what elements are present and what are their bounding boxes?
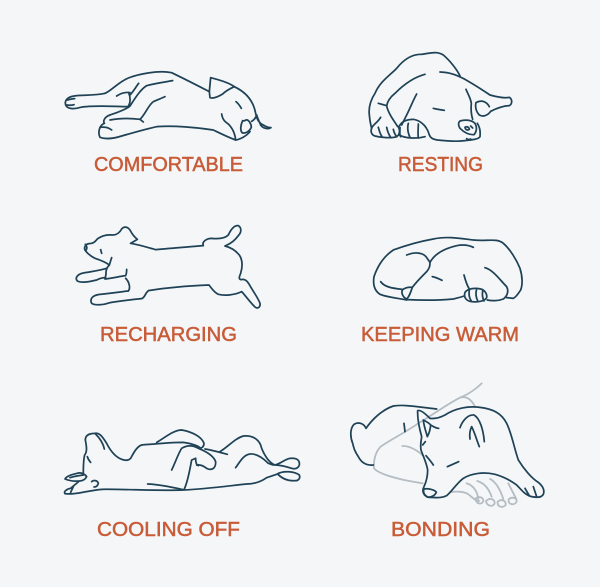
icon: human arm under dog	[374, 383, 517, 507]
label: resting: RESTING	[398, 154, 483, 176]
label: cooling off: COOLING OFF	[97, 519, 240, 541]
panel: comfortable	[65, 72, 271, 176]
label: bonding: BONDING	[391, 519, 490, 541]
label: keeping warm: KEEPING WARM	[361, 324, 519, 346]
label: recharging: RECHARGING	[100, 324, 237, 346]
icon: dog lying on its side	[65, 72, 271, 140]
icon: dog stretched as if running	[76, 226, 260, 308]
icon: sleeping dog	[351, 405, 544, 498]
panel: bonding	[351, 383, 544, 541]
icon: dog lying on its back	[65, 430, 300, 494]
label: comfortable: COMFORTABLE	[94, 154, 243, 176]
panel: keeping warm	[361, 238, 522, 346]
panel: recharging	[76, 226, 260, 346]
icon: dog resting head on paws	[369, 53, 512, 141]
panel: cooling off	[65, 430, 300, 541]
icon: curled-up dog	[374, 238, 522, 302]
panel: resting	[369, 53, 512, 176]
